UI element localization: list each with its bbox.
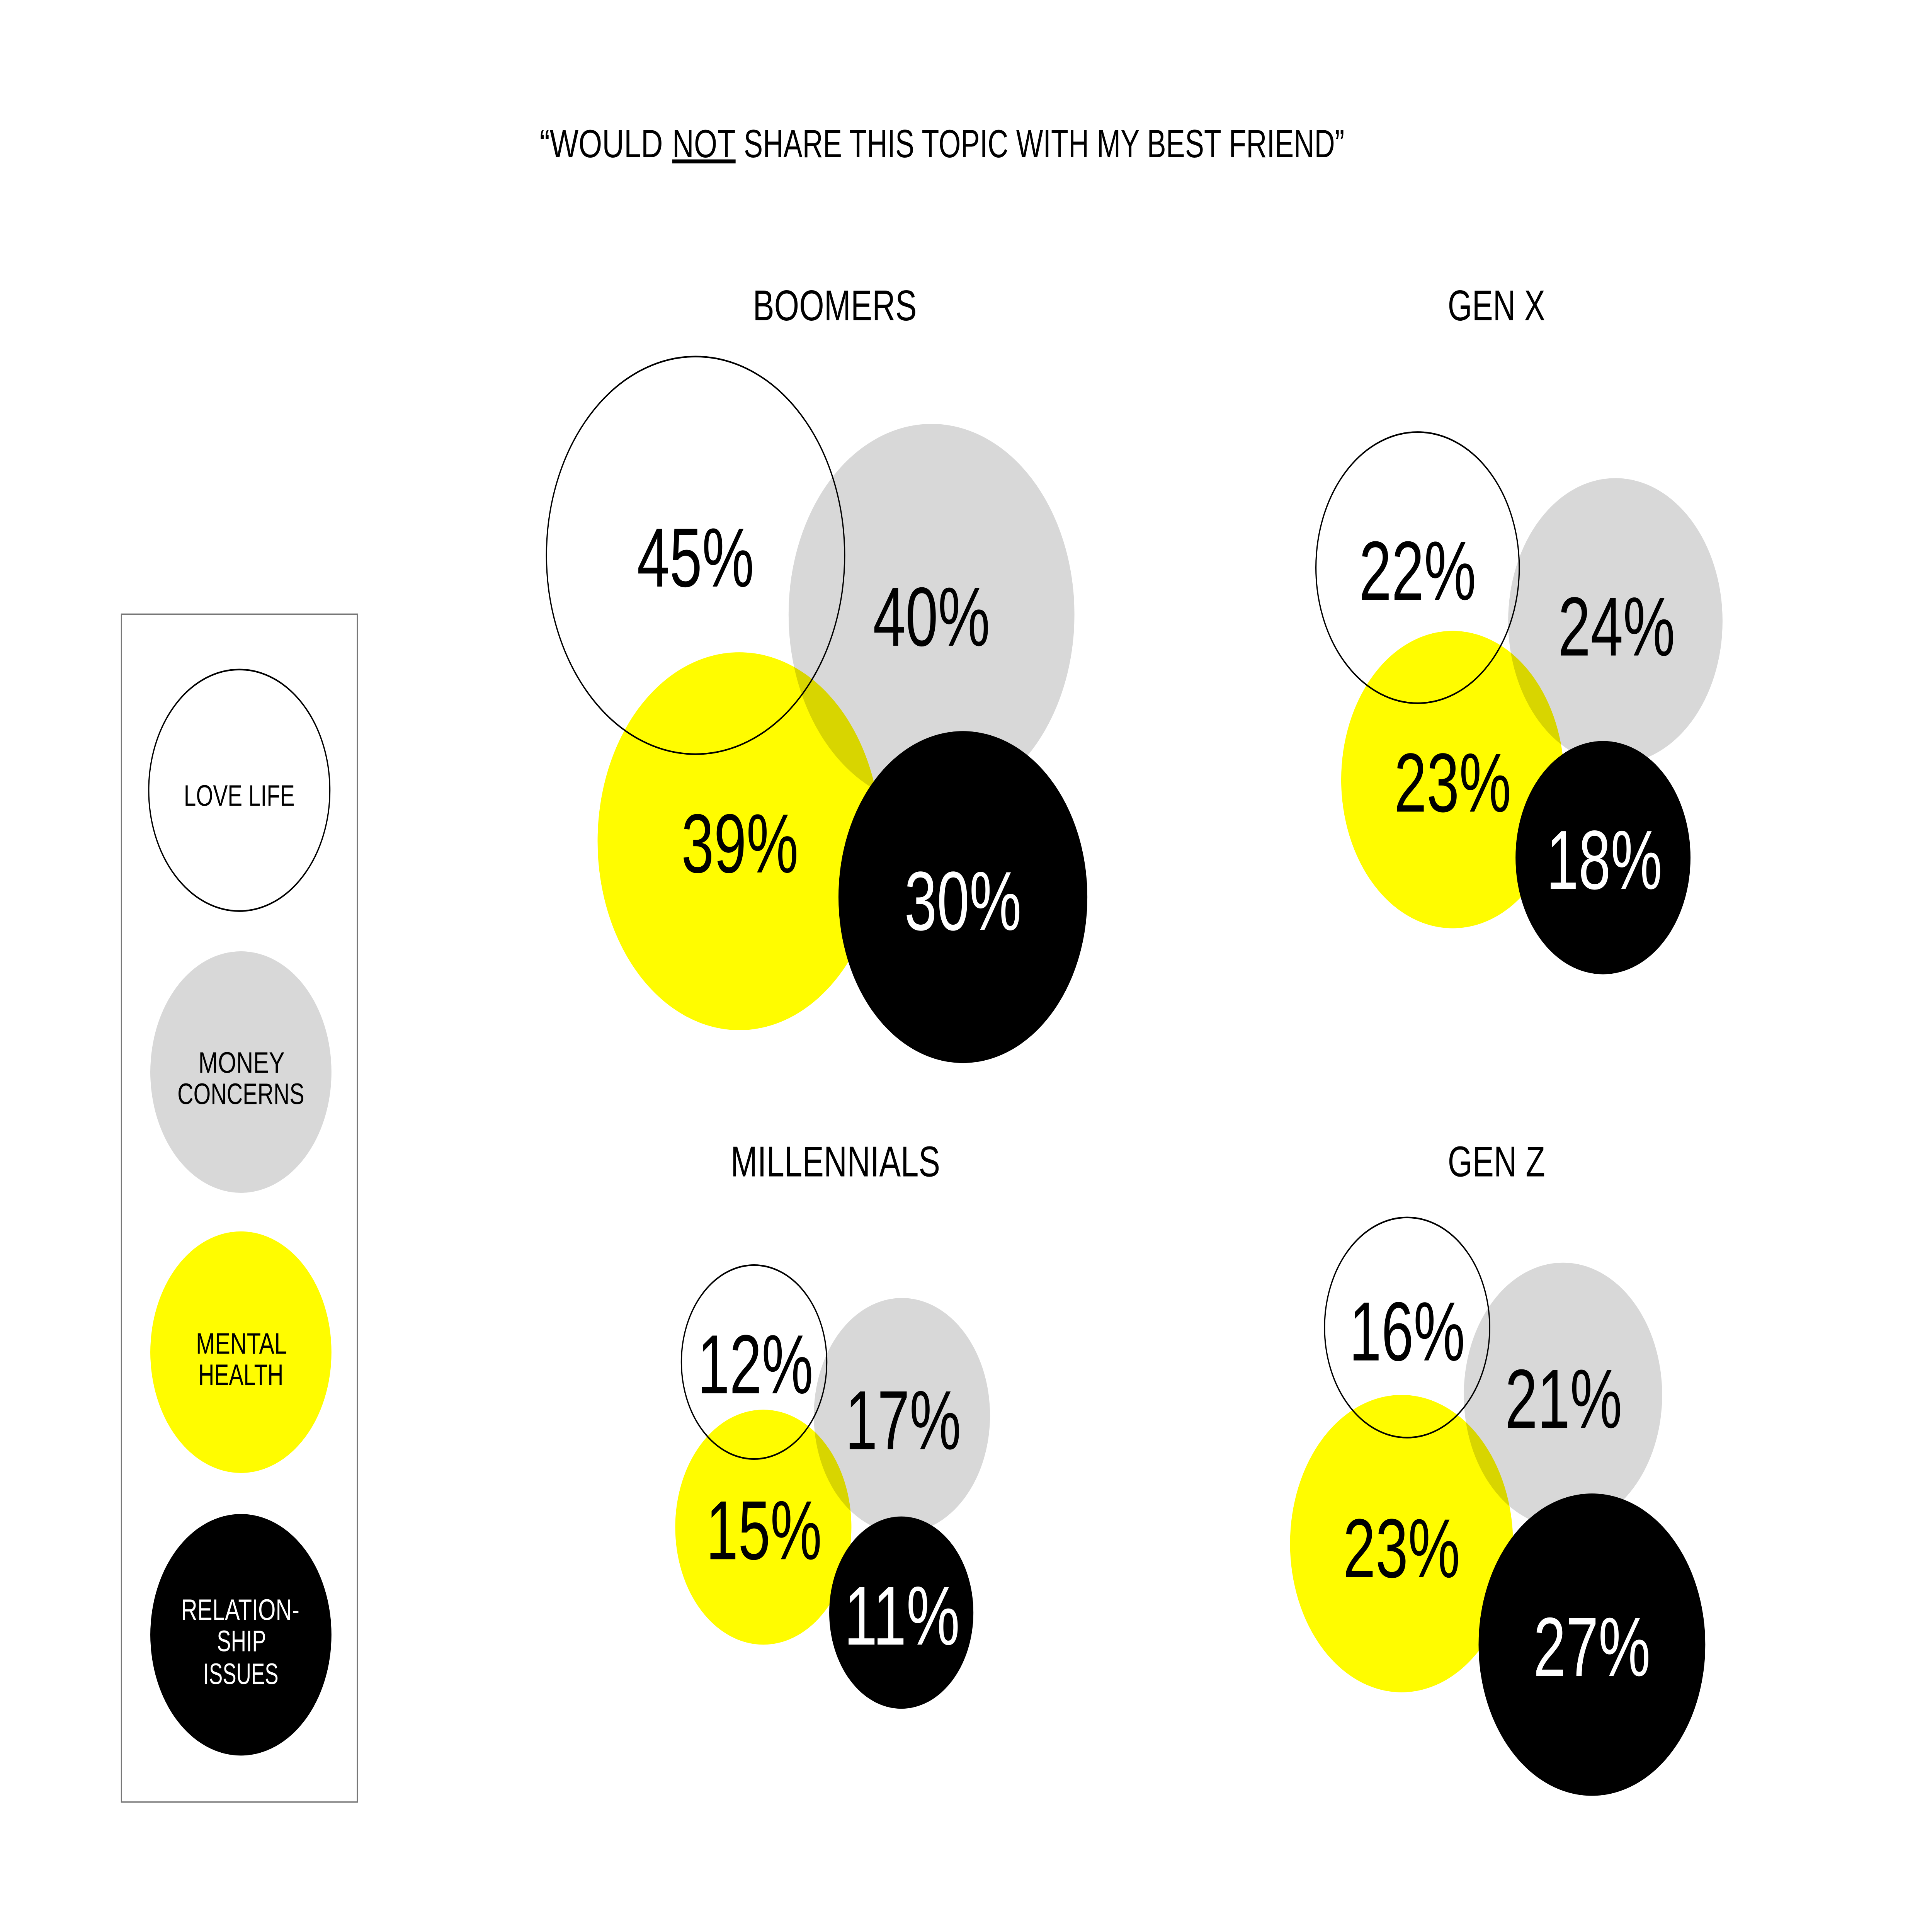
- bubble: love life 12%: [681, 1265, 827, 1459]
- legend item: relationship issues: SHIP: [217, 1624, 266, 1658]
- panel: millennials: [675, 1138, 990, 1709]
- heading: gen z: GEN Z: [1448, 1138, 1545, 1185]
- bubble: love life 12%: 12%: [697, 1317, 813, 1411]
- panel: gen z: [1290, 1138, 1705, 1796]
- bubble: money concerns 21%: [1464, 1263, 1662, 1527]
- bubble: relationship issues 11%: 11%: [844, 1568, 960, 1663]
- bubble: money concerns 40%: [789, 424, 1075, 805]
- bubble: relationship issues 27%: 27%: [1533, 1600, 1650, 1694]
- bubble: mental health 15%: 15%: [706, 1483, 822, 1577]
- bubble: love life 16%: [1325, 1218, 1490, 1438]
- bubble: relationship issues 11%: [829, 1517, 973, 1709]
- bubble: love life 22%: [1316, 432, 1519, 703]
- bubble: love life 22%: 22%: [1359, 524, 1476, 617]
- bubble: relationship issues 18%: [1515, 741, 1690, 974]
- bubble: love life 45%: [546, 357, 845, 754]
- legend item: mental health: MENTAL: [196, 1327, 287, 1361]
- bubble: relationship issues 30%: 30%: [905, 854, 1021, 948]
- bubble: relationship issues 27%: [1479, 1493, 1705, 1796]
- legend item: money concerns: MONEY: [198, 1046, 285, 1080]
- bubble: mental health 23%: [1290, 1395, 1513, 1692]
- panel: gen x: [1316, 281, 1723, 974]
- panel: boomers: [546, 281, 1087, 1063]
- panel: legend: [121, 614, 357, 1802]
- bubble: money concerns 24%: 24%: [1558, 580, 1675, 673]
- title: SHARE THIS TOPIC WITH MY BEST FRIEND”: [744, 122, 1344, 166]
- legend item: relationship issues: ISSUES: [203, 1657, 279, 1690]
- bubble: mental health 39%: 39%: [681, 796, 798, 890]
- bubble: love life 16%: 16%: [1349, 1284, 1465, 1378]
- legend item: love life: LOVE LIFE: [184, 779, 295, 813]
- heading: millennials: MILLENNIALS: [731, 1138, 940, 1185]
- heading: gen x: GEN X: [1448, 281, 1545, 330]
- legend item: money concerns: [150, 951, 332, 1193]
- bubble: mental health 23%: 23%: [1394, 736, 1511, 830]
- bubble: mental health 23%: 23%: [1343, 1501, 1460, 1595]
- bubble: relationship issues 18%: 18%: [1546, 813, 1662, 907]
- title: NOT: [672, 122, 736, 166]
- bubble: mental health 39%: [598, 652, 881, 1030]
- bubble: money concerns 24%: [1508, 478, 1723, 764]
- bubble: money concerns 17%: [814, 1298, 990, 1533]
- bubble: love life 45%: 45%: [637, 510, 754, 604]
- bubble: money concerns 40%: 40%: [873, 570, 990, 663]
- heading: boomers: BOOMERS: [753, 281, 917, 330]
- legend item: relationship issues: [150, 1514, 332, 1755]
- bubble: mental health 23%: [1341, 631, 1564, 928]
- legend item: mental health: [150, 1231, 332, 1473]
- bubble: money concerns 17%: 17%: [845, 1373, 961, 1467]
- bubble: money concerns 21%: 21%: [1505, 1352, 1622, 1446]
- bubble: relationship issues 30%: [838, 731, 1087, 1063]
- legend frame: [121, 614, 357, 1802]
- bubble: mental health 15%: [675, 1410, 851, 1645]
- title: “WOULD: [540, 122, 663, 166]
- legend item: mental health: HEALTH: [198, 1358, 283, 1391]
- legend item: relationship issues: RELATION-: [181, 1594, 299, 1627]
- legend item: love life: [149, 670, 330, 911]
- legend item: money concerns: CONCERNS: [177, 1077, 304, 1111]
